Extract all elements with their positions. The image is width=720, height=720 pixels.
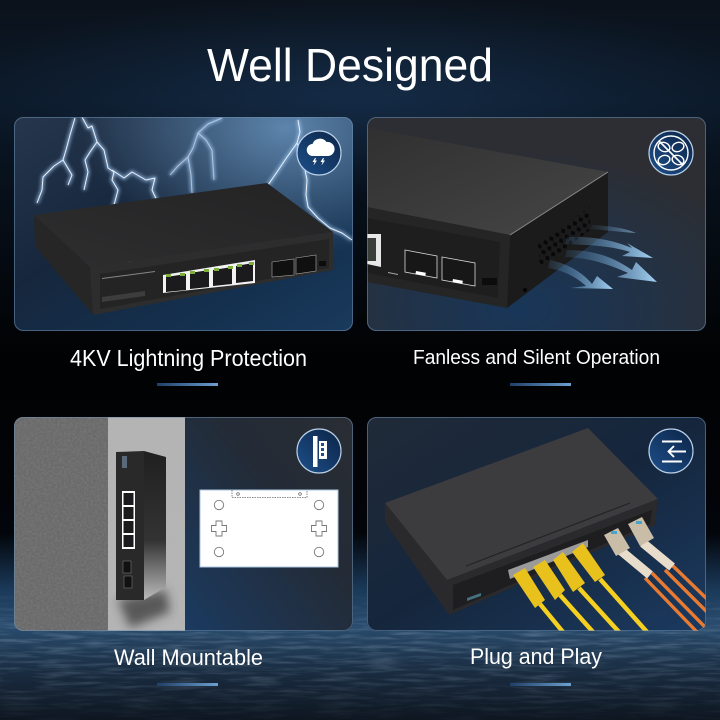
switch corner [367, 128, 608, 308]
mounting diagram [200, 490, 338, 567]
panel: wall mountable [14, 417, 353, 631]
switch with cables [385, 428, 708, 632]
label: lightning protection: 4KV Lightning Protection [70, 345, 307, 371]
label: fanless operation: Fanless and Silent Operation [413, 346, 660, 369]
icon: wall mount [297, 429, 341, 473]
panel: fanless operation [367, 117, 706, 331]
airflow arrows [548, 225, 657, 289]
icon: plug and play arrows [649, 429, 693, 473]
fiber cables [620, 543, 708, 632]
wall-mounted switch [116, 451, 170, 628]
label: wall mountable: Wall Mountable [114, 645, 263, 670]
underline: plug and play [510, 683, 571, 686]
icon: storm cloud [297, 131, 341, 175]
icon: no fan [649, 131, 693, 175]
underline: wall mountable [157, 683, 218, 686]
title: Well Designed [207, 39, 493, 91]
panel: lightning protection [14, 117, 353, 331]
switch [34, 183, 333, 315]
panel: plug and play [367, 417, 708, 632]
ethernet cables [540, 579, 647, 632]
lightning bolts [37, 117, 352, 268]
underline: fanless operation [510, 383, 571, 386]
underline: lightning protection [157, 383, 218, 386]
label: plug and play: Plug and Play [470, 644, 602, 669]
